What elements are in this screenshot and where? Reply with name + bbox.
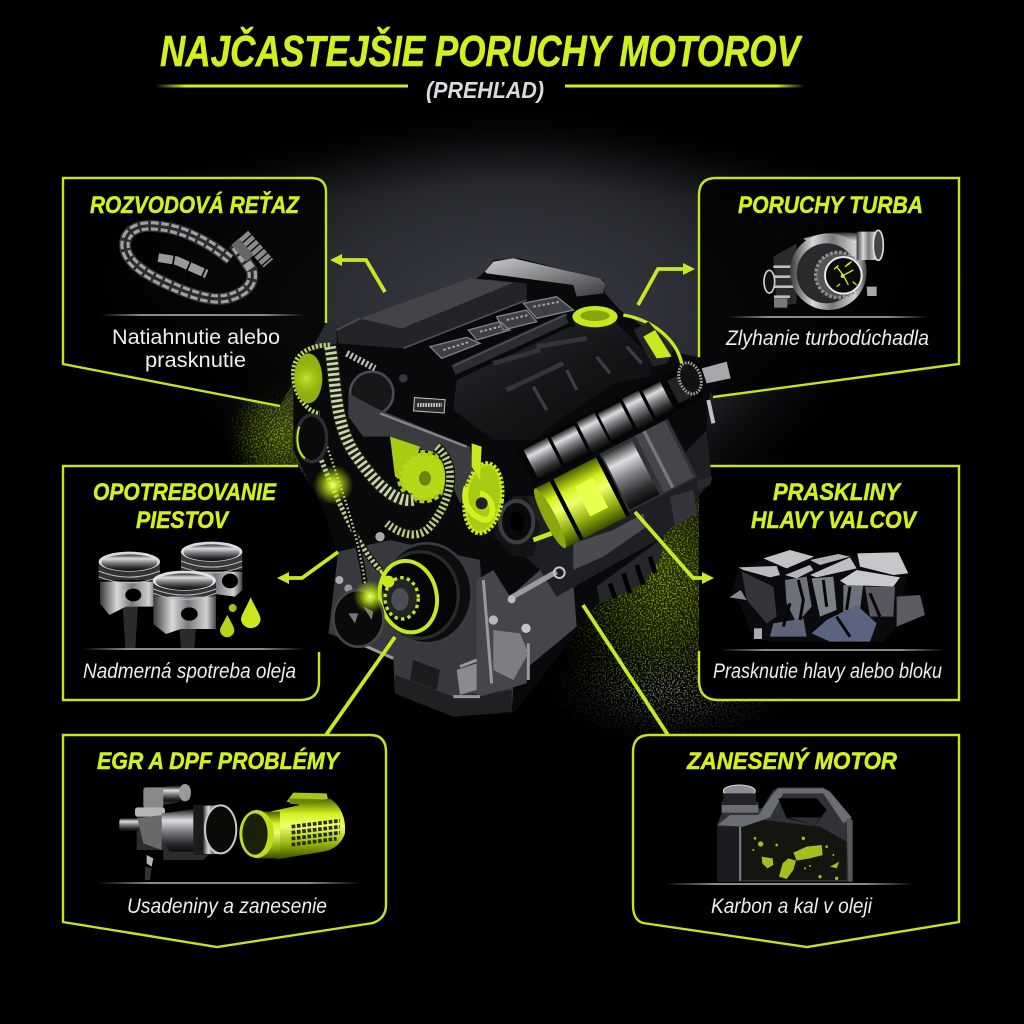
panel: zanesený motor [633,735,959,947]
left piston [99,552,160,648]
lime cylinder [529,419,699,551]
divider [97,882,360,884]
crankshaft pulley [373,543,472,643]
lower block [328,532,577,717]
panel: opotrebovanie piestov [63,466,319,700]
lower-left idler [333,590,383,647]
description: Usadeniny a zanesenie [127,895,327,918]
description: Nadmerná spotreba oleja [83,660,296,683]
cam end ring and cap [675,360,731,423]
panel: poruchy turba [699,178,959,397]
glow points [290,362,387,613]
oil drops [241,597,261,628]
icon: turbocharger [764,230,883,310]
description: Zlyhanie turbodúchadla [725,327,929,350]
arrow: to opotrebovanie piestov [277,552,338,584]
heading: EGR A DPF PROBLÉMY [97,747,341,775]
heading: ZANESENÝ MOTOR [686,747,897,775]
arrow: to poruchy turba [638,263,695,305]
lime tensioner [460,443,506,536]
panel: rozvodová reťaz [63,178,326,406]
engine illustration [290,258,731,717]
sludge blotches [752,837,839,880]
heading: HLAVY VALCOV [751,507,918,534]
small lime idler [294,353,327,462]
sensor tag [414,398,445,413]
divider [100,314,305,316]
divider [720,649,945,651]
valve cover [430,297,653,440]
icon: pistons with oil drops [99,542,261,649]
divider [83,648,305,650]
engine silhouette [293,258,730,717]
icon: oil canister [717,785,853,882]
timing chain [293,345,450,583]
heading: ROZVODOVÁ REŤAZ [90,191,300,219]
middle block [493,430,713,603]
heading: PIESTOV [136,507,230,534]
camshaft [517,364,704,484]
panel: egr a dpf [63,735,386,947]
arrow: to praskliny hlavy valcov [635,512,714,584]
heading: OPOTREBOVANIE [93,479,277,506]
timing cover [348,372,477,503]
connector: to zanesený motor [583,605,668,735]
back piston [181,542,242,597]
divider [728,316,928,318]
heading: PORUCHY TURBA [738,192,923,219]
rule: right [565,84,805,88]
icon: dpf filter [239,793,345,859]
lime timing gear [390,437,447,508]
description: Karbon a kal v oleji [711,895,873,918]
subtitle: (PREHĽAD) [426,77,544,103]
description: Natiahnutie alebo [112,326,280,349]
title: NAJČASTEJŠIE PORUCHY MOTOROV [160,25,803,76]
heading: PRASKLINY [773,479,902,506]
icon: cracked cylinder head [729,550,925,642]
fins [597,540,662,603]
panel: praskliny hlavy valcov [697,466,959,700]
icon: egr valve [119,784,236,880]
front piston [153,571,216,649]
rule: left [155,84,408,88]
divider [665,883,915,885]
air cover [485,258,605,297]
description: Prasknutie hlavy alebo bloku [713,660,942,683]
airbox [337,278,527,348]
icon: timing chain [125,226,268,299]
arrow: to rozvodová reťaz [330,254,385,292]
lime hose and filler cap [572,306,682,367]
connector: to egr a dpf [326,637,395,735]
description: prasknutie [145,349,246,372]
